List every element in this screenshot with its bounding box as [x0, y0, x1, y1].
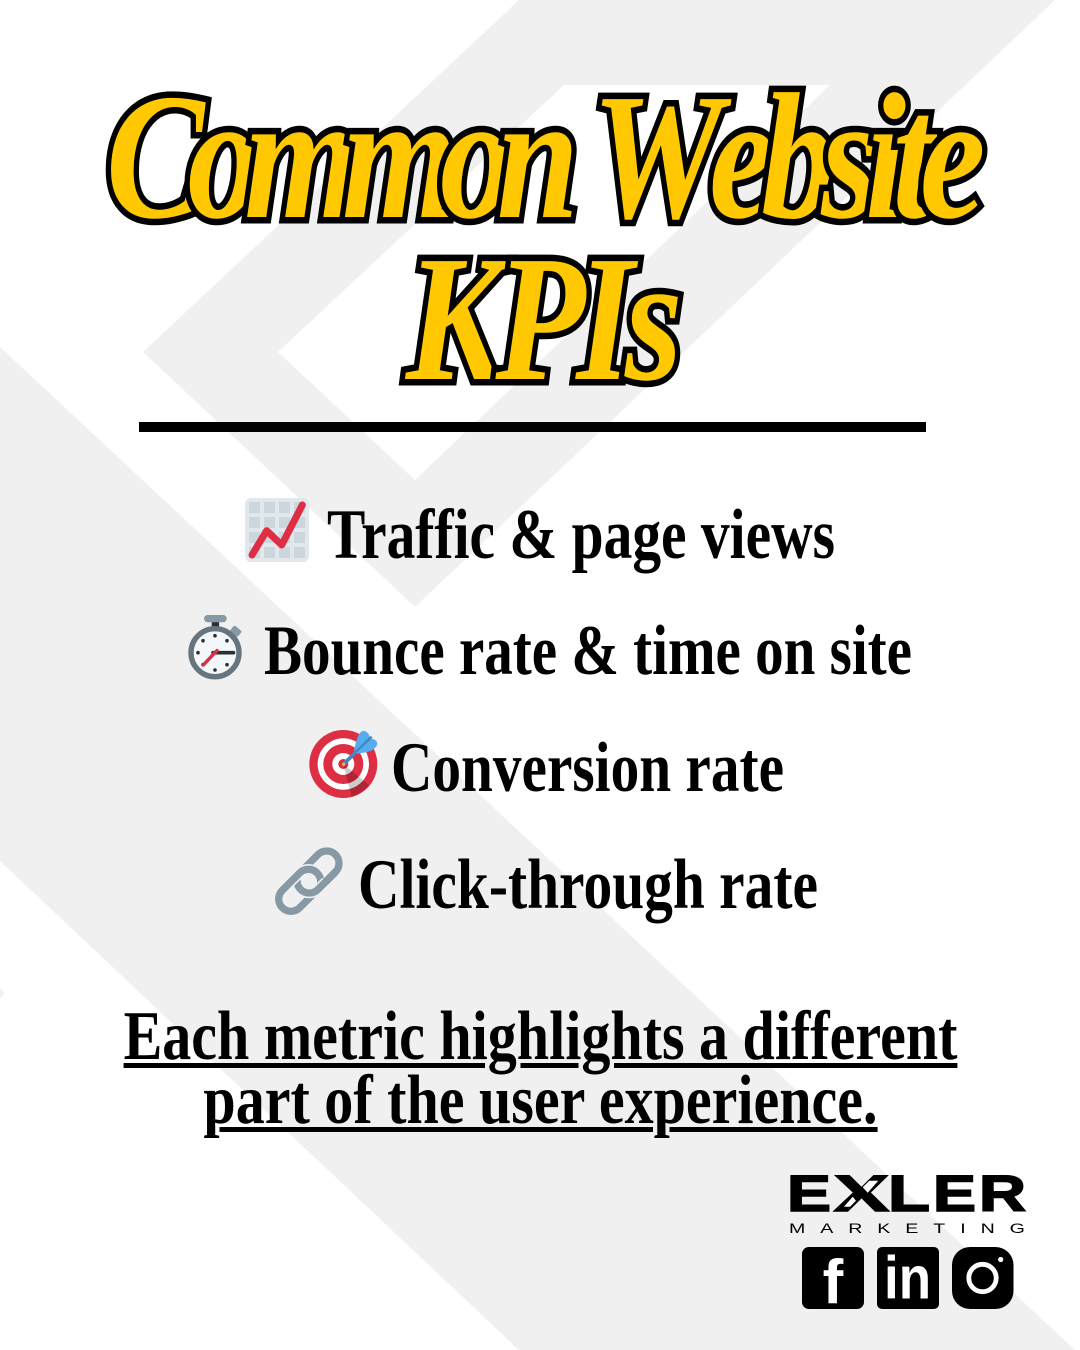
list item: click-through rate: [274, 846, 818, 924]
list item: traffic: [245, 496, 835, 574]
logo wordmark: [787, 1165, 1026, 1222]
divider line: [139, 422, 926, 432]
icon: target with dart: [309, 730, 377, 798]
icon: facebook: f: [823, 1248, 844, 1317]
logo wordmark: R: [979, 1165, 1026, 1222]
logo wordmark: E: [933, 1165, 976, 1222]
logo wordmark: L: [888, 1165, 930, 1222]
logo X cut-outs: [844, 1181, 878, 1207]
icon: chart: [245, 498, 309, 562]
label: conversion rate: Conversion rate: [391, 729, 784, 807]
list item: bounce rate: [191, 612, 912, 690]
logo wordmark: E: [787, 1165, 831, 1222]
logo wordmark: X: [834, 1165, 889, 1222]
label: bounce rate and time on site: Bounce rate & time on site: [264, 612, 912, 690]
title: ebsite: [709, 56, 972, 256]
list item: conversion rate: [309, 729, 784, 807]
closing statement: [124, 998, 958, 1139]
label: click-through rate: Click-through rate: [358, 846, 818, 924]
icon: stopwatch: [191, 615, 242, 677]
icon: facebook: [802, 1247, 864, 1317]
icon: instagram: [952, 1247, 1014, 1309]
title: KPIs: [404, 218, 678, 418]
social icons: [802, 1244, 1014, 1317]
title: W: [592, 56, 731, 256]
logo tagline: MARKETING: [789, 1221, 1025, 1236]
closing statement: Each metric highlights a different: [124, 998, 957, 1075]
title: [106, 56, 983, 418]
brand logo: [787, 1165, 1026, 1236]
icon: linkedin: in: [884, 1244, 931, 1312]
icon: chain link: [274, 846, 344, 916]
title: Common: [106, 56, 562, 256]
closing statement: part of the user experience.: [203, 1062, 878, 1139]
label: traffic and page views: Traffic & page views: [327, 496, 835, 574]
